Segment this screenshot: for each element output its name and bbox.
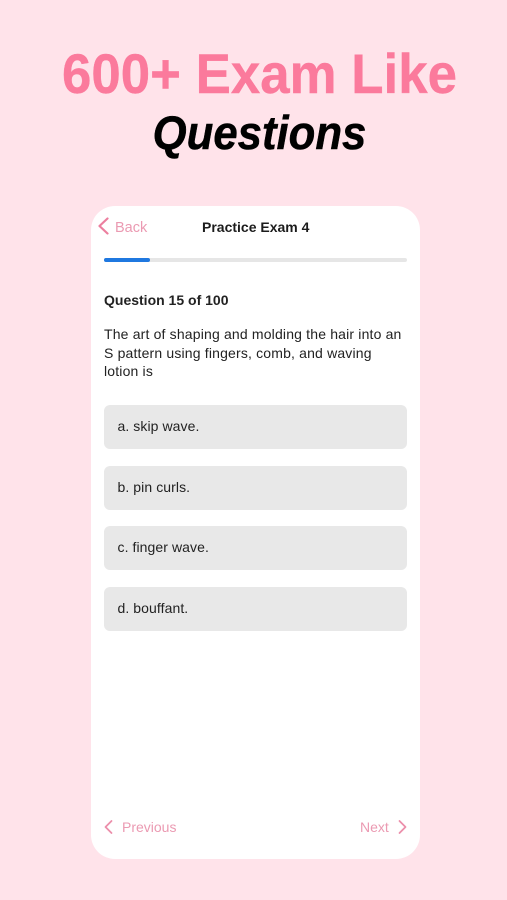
progress fill <box>104 258 150 262</box>
back label: Back <box>115 220 147 236</box>
question text: lotion is <box>104 363 153 379</box>
question counter: Question 15 of 100 <box>104 292 228 308</box>
answer option b: b. pin curls. <box>118 478 190 494</box>
answer option a: a. skip wave. <box>118 418 199 434</box>
panel: phone screen card <box>91 206 420 859</box>
question text <box>104 326 402 379</box>
icon: next chevron <box>398 820 406 834</box>
icon: previous chevron <box>104 820 112 834</box>
answer option d: d. bouffant. <box>118 600 188 616</box>
question text: The art of shaping and molding the hair into an <box>104 326 402 342</box>
icon: back chevron <box>98 217 109 235</box>
answer option b <box>104 466 407 510</box>
answer option a <box>104 405 407 449</box>
answer option c <box>104 526 407 570</box>
question text: S pattern using fingers, comb, and waving <box>104 344 372 360</box>
answer option d <box>104 586 407 630</box>
previous label: Previous <box>122 819 176 835</box>
progress bar <box>104 258 407 262</box>
next label: Next <box>360 819 389 835</box>
answer option c: c. finger wave. <box>118 539 209 555</box>
subtitle: Questions: Questions <box>153 106 366 159</box>
screen title: Practice Exam 4 <box>202 219 309 235</box>
title: 600+ Exam Like: 600+ Exam Like <box>62 42 457 105</box>
